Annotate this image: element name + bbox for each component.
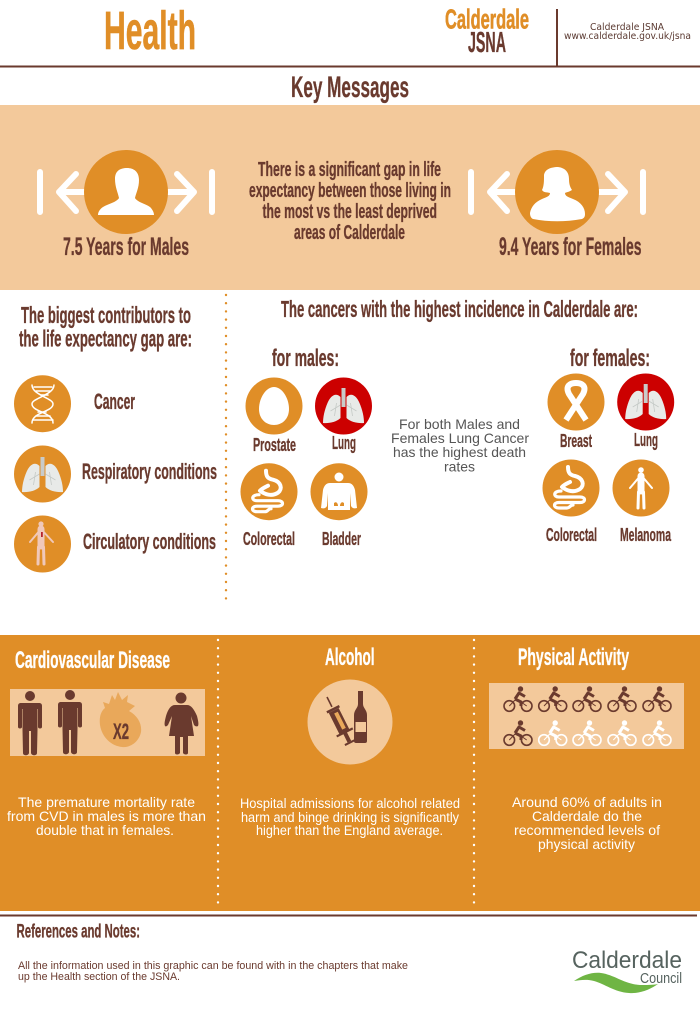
icon: breast ribbon bbox=[548, 374, 604, 430]
website details: www.calderdale.gov.uk/jsna bbox=[564, 31, 691, 42]
panel: biggest contributors bbox=[14, 302, 217, 572]
text: alcohol: higher than the England average. bbox=[256, 823, 443, 838]
label: Respiratory conditions: Respiratory conditions bbox=[82, 459, 217, 484]
text: alcohol bbox=[240, 796, 460, 838]
column: alcohol bbox=[240, 644, 460, 838]
icon: melanoma body bbox=[612, 460, 670, 516]
text: CVD: The premature mortality rate bbox=[18, 794, 195, 810]
label: Colorectal female: Colorectal bbox=[546, 524, 597, 545]
icon: prostate bbox=[246, 378, 302, 434]
icon: lungs bbox=[14, 446, 71, 502]
header bar: JSNA bbox=[468, 27, 506, 59]
footer rule bbox=[0, 914, 697, 916]
icon: heart x2: X2 bbox=[113, 719, 129, 744]
panel: cancers bbox=[240, 296, 674, 549]
text: physical activity: recommended levels of bbox=[514, 822, 660, 838]
icon: female figure bbox=[165, 692, 198, 754]
label: Cancer: Cancer bbox=[94, 389, 135, 414]
pictogram: CVD males vs females bbox=[10, 689, 205, 756]
label: Lung male: Lung bbox=[332, 432, 356, 453]
text: CVD: double that in females. bbox=[36, 822, 174, 838]
text: physical activity bbox=[512, 794, 662, 852]
note: lung cancer death rates bbox=[391, 416, 529, 474]
footer: references and notes bbox=[16, 920, 408, 983]
heading: Cardiovascular Disease: Cardiovascular Disease bbox=[15, 647, 170, 674]
key message text: expectancy between those living in bbox=[249, 179, 451, 202]
heading: contributors: the life expectancy gap are: bbox=[19, 326, 192, 352]
text: alcohol: Hospital admissions for alcohol related bbox=[240, 796, 460, 811]
note: lung cancer death rates: For both Males and bbox=[399, 416, 520, 432]
icon: male gap arrows bbox=[40, 150, 212, 234]
text: physical activity: Calderdale do the bbox=[532, 808, 642, 824]
column: cardiovascular disease bbox=[7, 647, 206, 838]
icon: male figure 2 bbox=[58, 690, 82, 754]
website details bbox=[564, 22, 691, 42]
icon: bladder bbox=[310, 463, 368, 520]
text: references note: All the information used in this graphic can be found with in the chapters that make bbox=[18, 960, 408, 972]
website details: Calderdale JSNA bbox=[590, 22, 664, 33]
column: physical activity bbox=[489, 644, 684, 852]
heading: contributors bbox=[19, 302, 192, 352]
note: lung cancer death rates: has the highest death bbox=[393, 444, 526, 460]
icon: circulatory body bbox=[14, 516, 71, 572]
label: Circulatory conditions: Circulatory conditions bbox=[83, 529, 216, 554]
key message text bbox=[249, 158, 451, 244]
note: lung cancer death rates: rates bbox=[444, 458, 475, 474]
text: references note: up the Health section of the JSNA. bbox=[18, 971, 180, 983]
icon: male figure 1 bbox=[18, 691, 42, 755]
logo: Calderdale Council bbox=[572, 947, 682, 993]
header divider bbox=[556, 9, 558, 66]
label: Bladder: Bladder bbox=[322, 528, 361, 549]
panel: orange statistics band bbox=[0, 635, 700, 911]
icon: colorectal female bbox=[542, 460, 600, 516]
group: for females bbox=[542, 345, 674, 545]
text: CVD: from CVD in males is more than bbox=[7, 808, 206, 824]
heading: Alcohol: Alcohol bbox=[325, 644, 374, 671]
icon: DNA bbox=[14, 375, 71, 432]
label: Colorectal male: Colorectal bbox=[243, 528, 295, 549]
icon: lung female bbox=[617, 374, 674, 430]
divider: dotted vertical bbox=[225, 294, 227, 600]
text: physical activity: physical activity bbox=[538, 836, 635, 852]
header rule bbox=[0, 66, 700, 68]
text: CVD bbox=[7, 794, 206, 838]
heading: Key Messages: Key Messages bbox=[291, 71, 409, 104]
title: Health: Health bbox=[104, 1, 196, 61]
heading: References and Notes: References and Notes: bbox=[16, 920, 140, 942]
header bar bbox=[0, 1, 700, 68]
note: lung cancer death rates: Females Lung Cancer bbox=[391, 430, 529, 446]
logo: Calderdale Council: Council bbox=[640, 971, 682, 987]
icon: lung male bbox=[315, 378, 372, 434]
icon: heart x2 bbox=[100, 692, 141, 747]
label: Lung female: Lung bbox=[634, 429, 658, 450]
icon: colorectal male bbox=[240, 463, 298, 520]
key message text: the most vs the least deprived bbox=[262, 200, 437, 223]
brand: Calderdale: Calderdale bbox=[445, 4, 529, 34]
label: male gap: 7.5 Years for Males bbox=[63, 233, 189, 261]
text: alcohol: harm and binge drinking is significantly bbox=[241, 810, 459, 825]
key message text: areas of Calderdale bbox=[294, 221, 405, 244]
label: Breast: Breast bbox=[560, 430, 592, 451]
icon: female gap arrows bbox=[471, 150, 643, 234]
heading: for males: for males: bbox=[272, 345, 339, 372]
logo: Calderdale Council: Calderdale bbox=[572, 947, 682, 974]
panel: life expectancy gap bbox=[0, 105, 700, 290]
pictogram: cyclists 6 of 10 bbox=[489, 683, 684, 749]
group: for males bbox=[240, 345, 372, 549]
text: references note bbox=[18, 960, 408, 983]
text: physical activity: Around 60% of adults in bbox=[512, 794, 662, 810]
label: Prostate: Prostate bbox=[253, 434, 296, 455]
key message text: There is a significant gap in life bbox=[258, 158, 441, 181]
icon: syringe and bottle bbox=[308, 680, 392, 764]
heading: contributors: The biggest contributors to bbox=[21, 302, 191, 328]
divider dots bbox=[218, 640, 474, 902]
